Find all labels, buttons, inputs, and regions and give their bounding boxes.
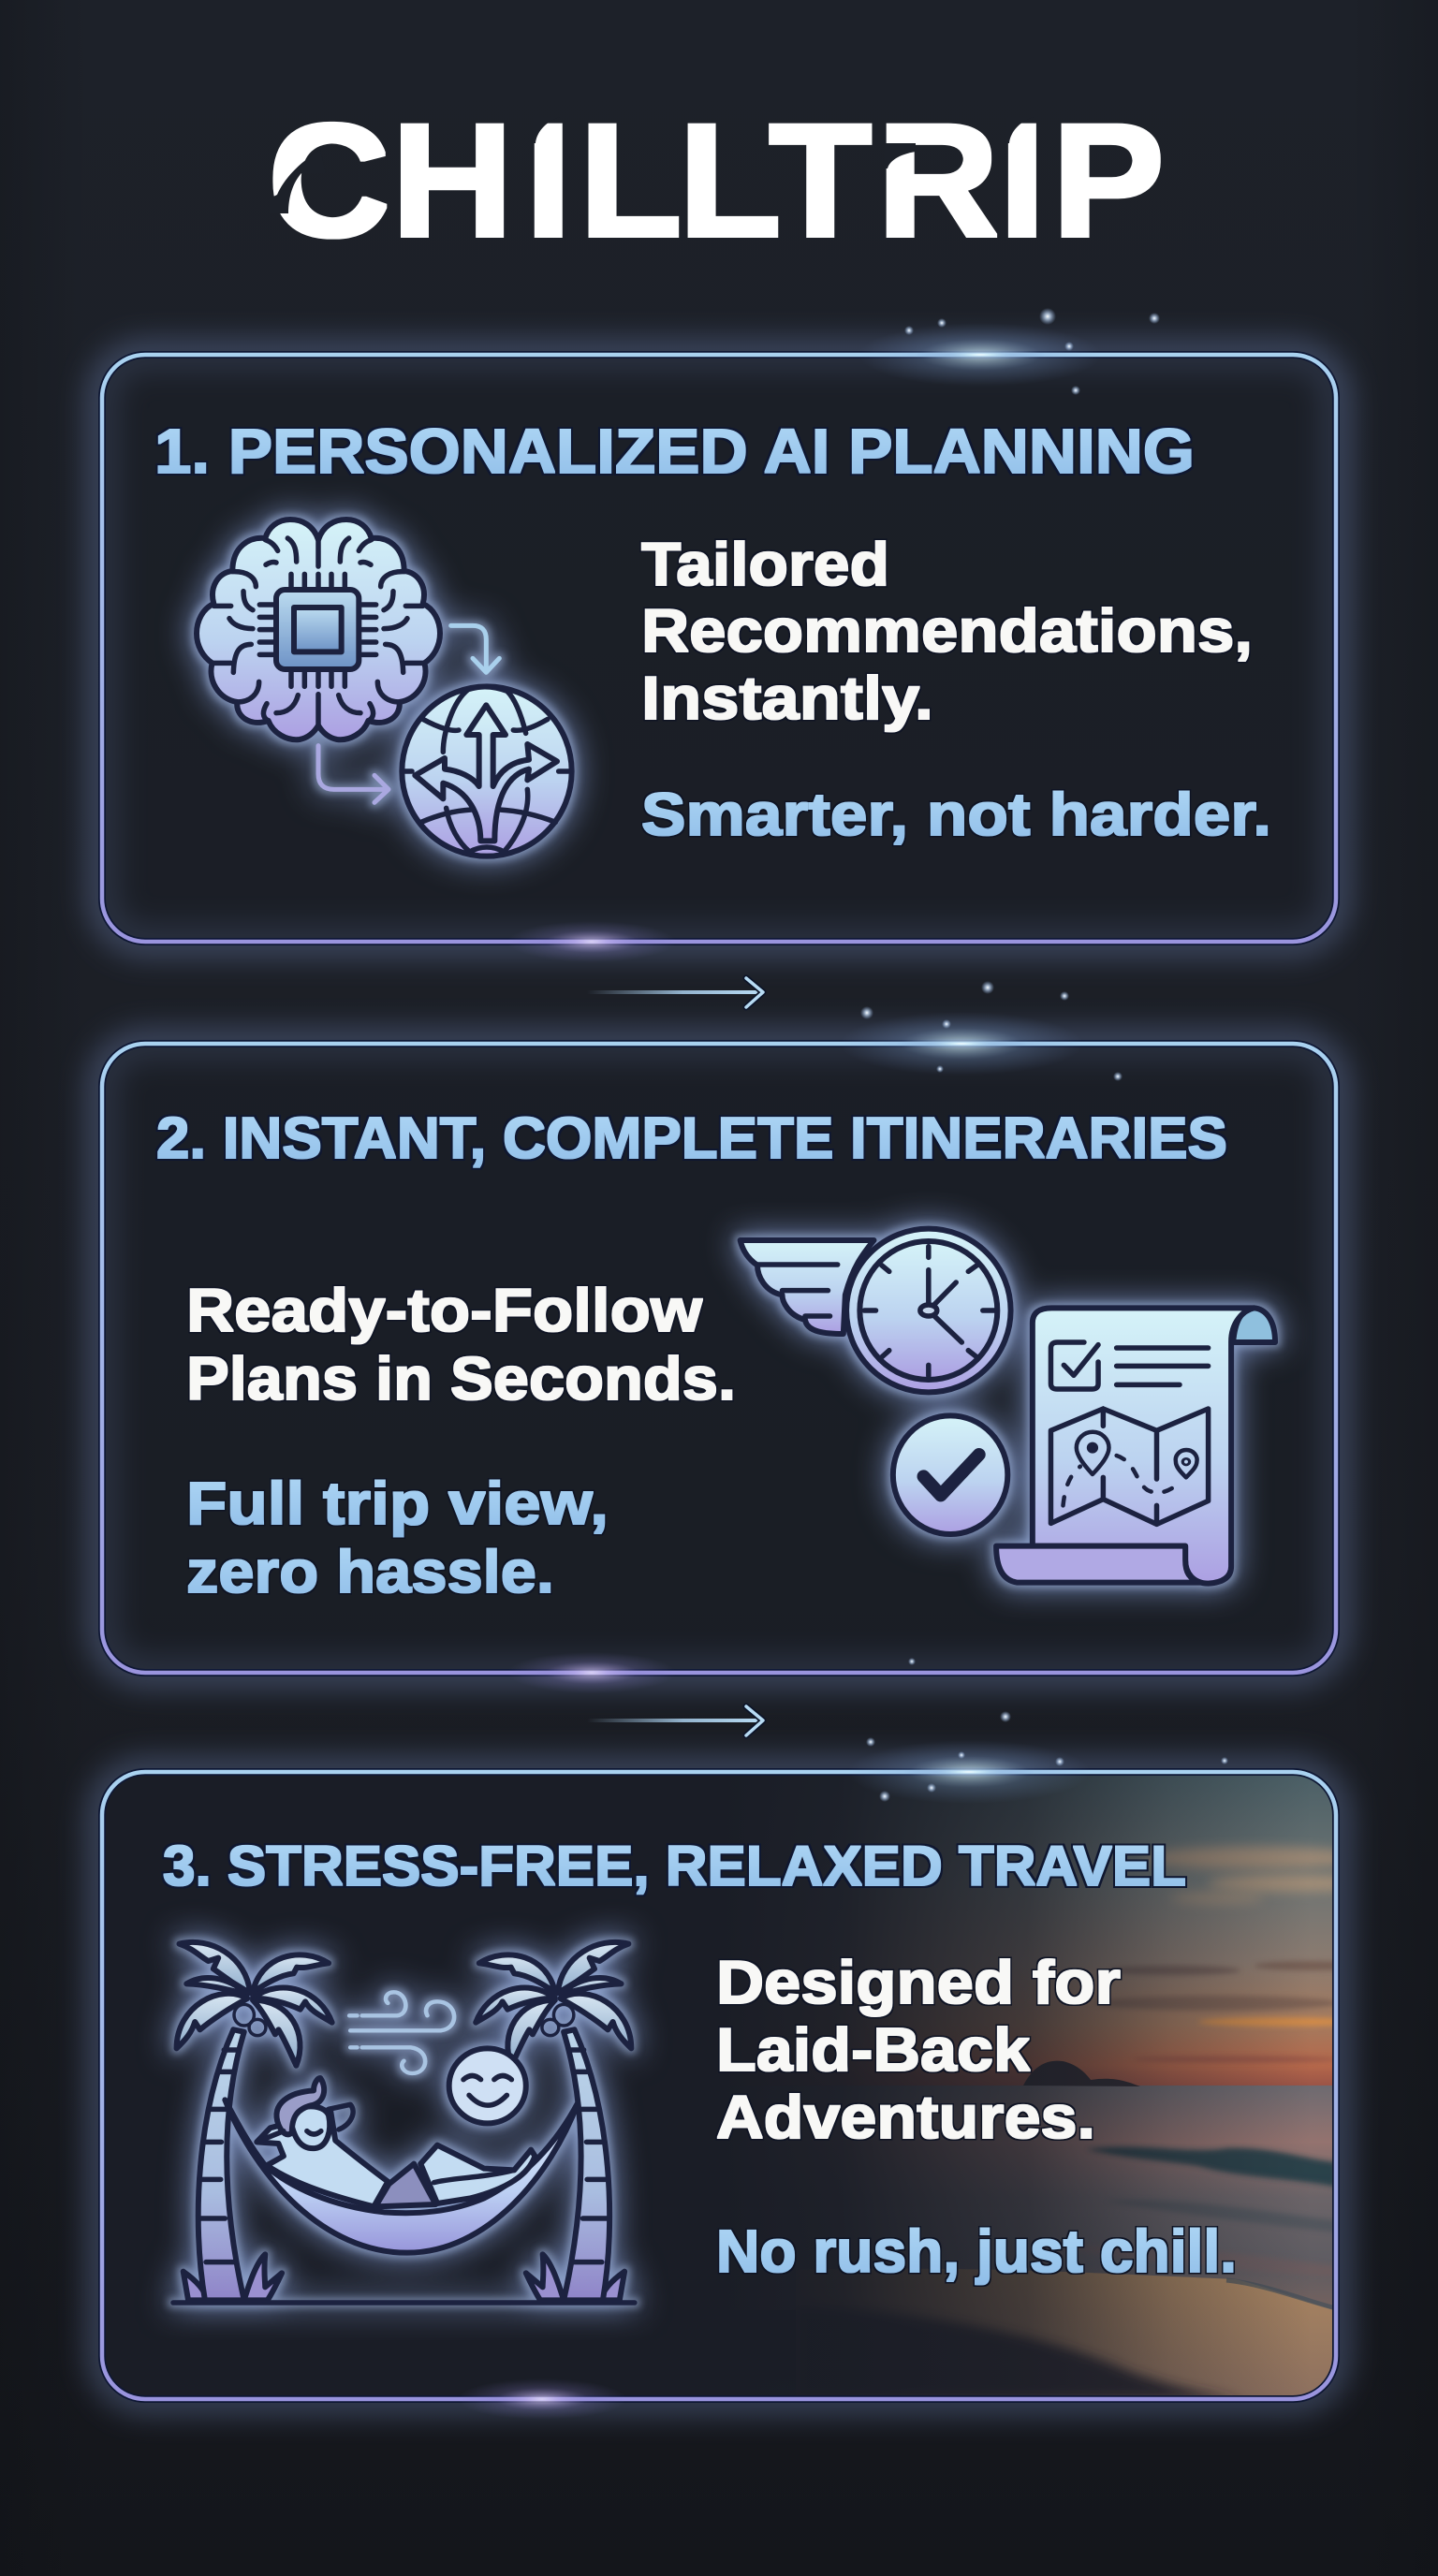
heading 3: 3. STRESS-FREE, RELAXED TRAVEL <box>163 1835 1186 1897</box>
icon: clock, check and itinerary scroll <box>741 1229 1275 1584</box>
text: panel 3 white statement <box>716 1948 1121 2151</box>
resting person <box>257 2078 535 2206</box>
text: panel 2 white statement: Ready-to-Follow <box>186 1276 702 1344</box>
right palm <box>476 1942 631 2300</box>
heading 2: 2. INSTANT, COMPLETE ITINERARIES <box>156 1106 1227 1171</box>
sparkles <box>866 1658 1228 1802</box>
winged clock <box>741 1229 1011 1392</box>
brain <box>197 520 440 739</box>
text: panel 3 tagline: No rush, just chill. <box>716 2217 1237 2285</box>
text: panel 1 white statement: Instantly. <box>641 664 933 732</box>
panel 3 glow <box>102 1772 1336 2399</box>
text: panel 1 white statement: Tailored <box>641 530 889 598</box>
ground grass <box>173 2254 635 2303</box>
title: CHILLTRIP <box>268 91 1165 271</box>
arrow: panel 2 to panel 3 <box>587 1706 763 1735</box>
text: panel 2 white statement <box>186 1276 736 1412</box>
smiley <box>449 2048 526 2123</box>
scroll with checklist and map <box>996 1308 1275 1584</box>
text: panel 3 white statement: Adventures. <box>716 2083 1095 2151</box>
text: panel 1 white statement <box>641 530 1253 732</box>
panel 2 frame <box>102 1012 1336 1693</box>
icon: brain chip to globe <box>197 520 572 856</box>
panel: instant itineraries <box>102 981 1336 1693</box>
icon: hammock between palms <box>173 1942 635 2303</box>
beach sunset photo <box>102 1772 1376 2399</box>
sparkles <box>860 981 1123 1081</box>
text: panel 1 white statement: Recommendations, <box>641 596 1253 665</box>
left palm <box>177 1942 332 2300</box>
panel: stress-free travel <box>102 1658 1376 2420</box>
sparkles <box>904 308 1160 395</box>
panel 3 frame <box>102 1740 1336 2420</box>
text: panel 1 tagline: Smarter, not harder. <box>641 781 1271 848</box>
text: panel 3 white statement: Designed for <box>716 1948 1121 2016</box>
panel: personalized AI planning <box>102 308 1336 962</box>
globe with route arrows <box>402 686 572 856</box>
text: panel 2 tagline: zero hassle. <box>186 1538 554 1605</box>
text: panel 3 white statement: Laid-Back <box>716 2015 1031 2084</box>
arrow: brain to globe, lavender <box>318 746 389 802</box>
wind lines <box>349 1992 454 2073</box>
heading 1: 1. PERSONALIZED AI PLANNING <box>154 417 1195 487</box>
text: panel 2 tagline <box>186 1470 609 1605</box>
hammock <box>225 2100 578 2253</box>
text: panel 2 white statement: Plans in Seconds. <box>186 1344 736 1412</box>
arrow: brain to globe, blue <box>451 625 499 672</box>
text: panel 2 tagline: Full trip view, <box>186 1470 609 1537</box>
check badge <box>893 1415 1007 1534</box>
arrow: panel 1 to panel 2 <box>587 978 763 1007</box>
panel 1 frame <box>102 323 1336 962</box>
